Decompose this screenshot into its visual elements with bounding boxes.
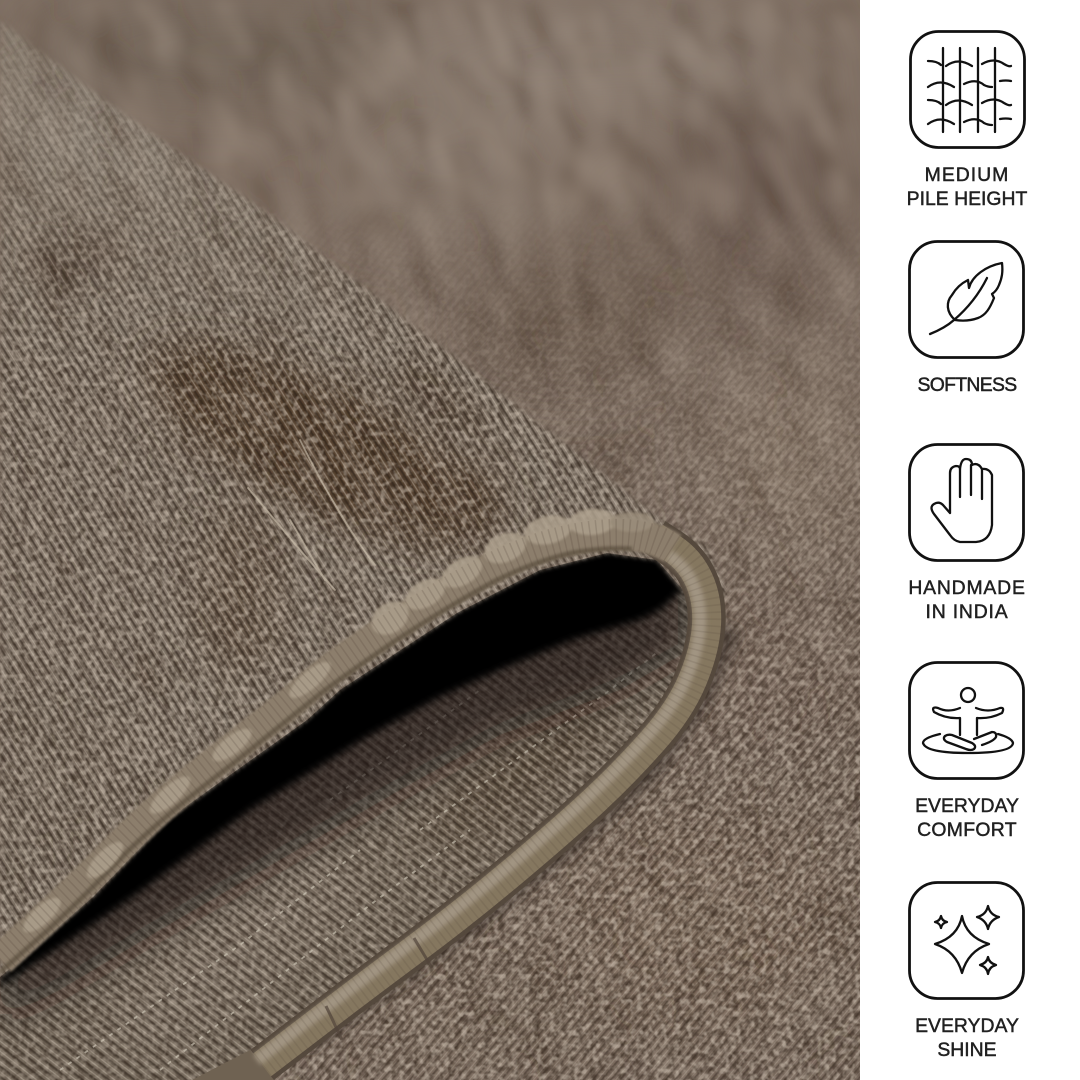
underside of the folded rug [0, 553, 688, 1080]
icon: sparkles [908, 881, 1025, 1000]
pale raised threads in the dark patch [248, 440, 375, 590]
photo: folded taupe rug close-up [0, 0, 860, 1080]
label: EVERYDAY [915, 795, 1019, 817]
floor rug weave texture [0, 278, 860, 1080]
feature: everyday comfort [908, 661, 1025, 841]
label: SHINE [937, 1039, 997, 1061]
floor rug surface [0, 0, 860, 1080]
feature: softness [908, 240, 1025, 396]
bound edge rope along the underside [192, 537, 707, 1080]
rim thread hatching [0, 534, 672, 960]
label [907, 164, 1028, 210]
icon: woven pile grid [909, 30, 1026, 149]
deep shadow inside the fold [0, 548, 690, 1020]
bound edge rim of the fold [0, 534, 672, 972]
label: PILE HEIGHT [907, 188, 1027, 210]
label: IN INDIA [926, 601, 1008, 623]
label [915, 795, 1019, 841]
label: EVERYDAY [915, 1015, 1019, 1037]
feature: medium pile height [907, 30, 1028, 210]
icon: meditating figure [908, 661, 1025, 780]
icon: open hand [908, 443, 1025, 562]
feature: handmade in india [908, 443, 1026, 623]
label [908, 577, 1026, 623]
white warp threads on the underside [60, 650, 660, 1070]
label: SOFTNESS [918, 374, 1016, 396]
rim stitch beads [18, 507, 654, 938]
icon: feather [908, 240, 1025, 359]
label: COMFORT [917, 819, 1017, 841]
shadow cast by the rope on the floor [300, 625, 728, 1040]
feature: everyday shine [908, 881, 1025, 1061]
label: MEDIUM [925, 164, 1009, 186]
top surface of the fold [0, 22, 728, 978]
label: HANDMADE [908, 577, 1026, 599]
label [915, 1015, 1019, 1061]
